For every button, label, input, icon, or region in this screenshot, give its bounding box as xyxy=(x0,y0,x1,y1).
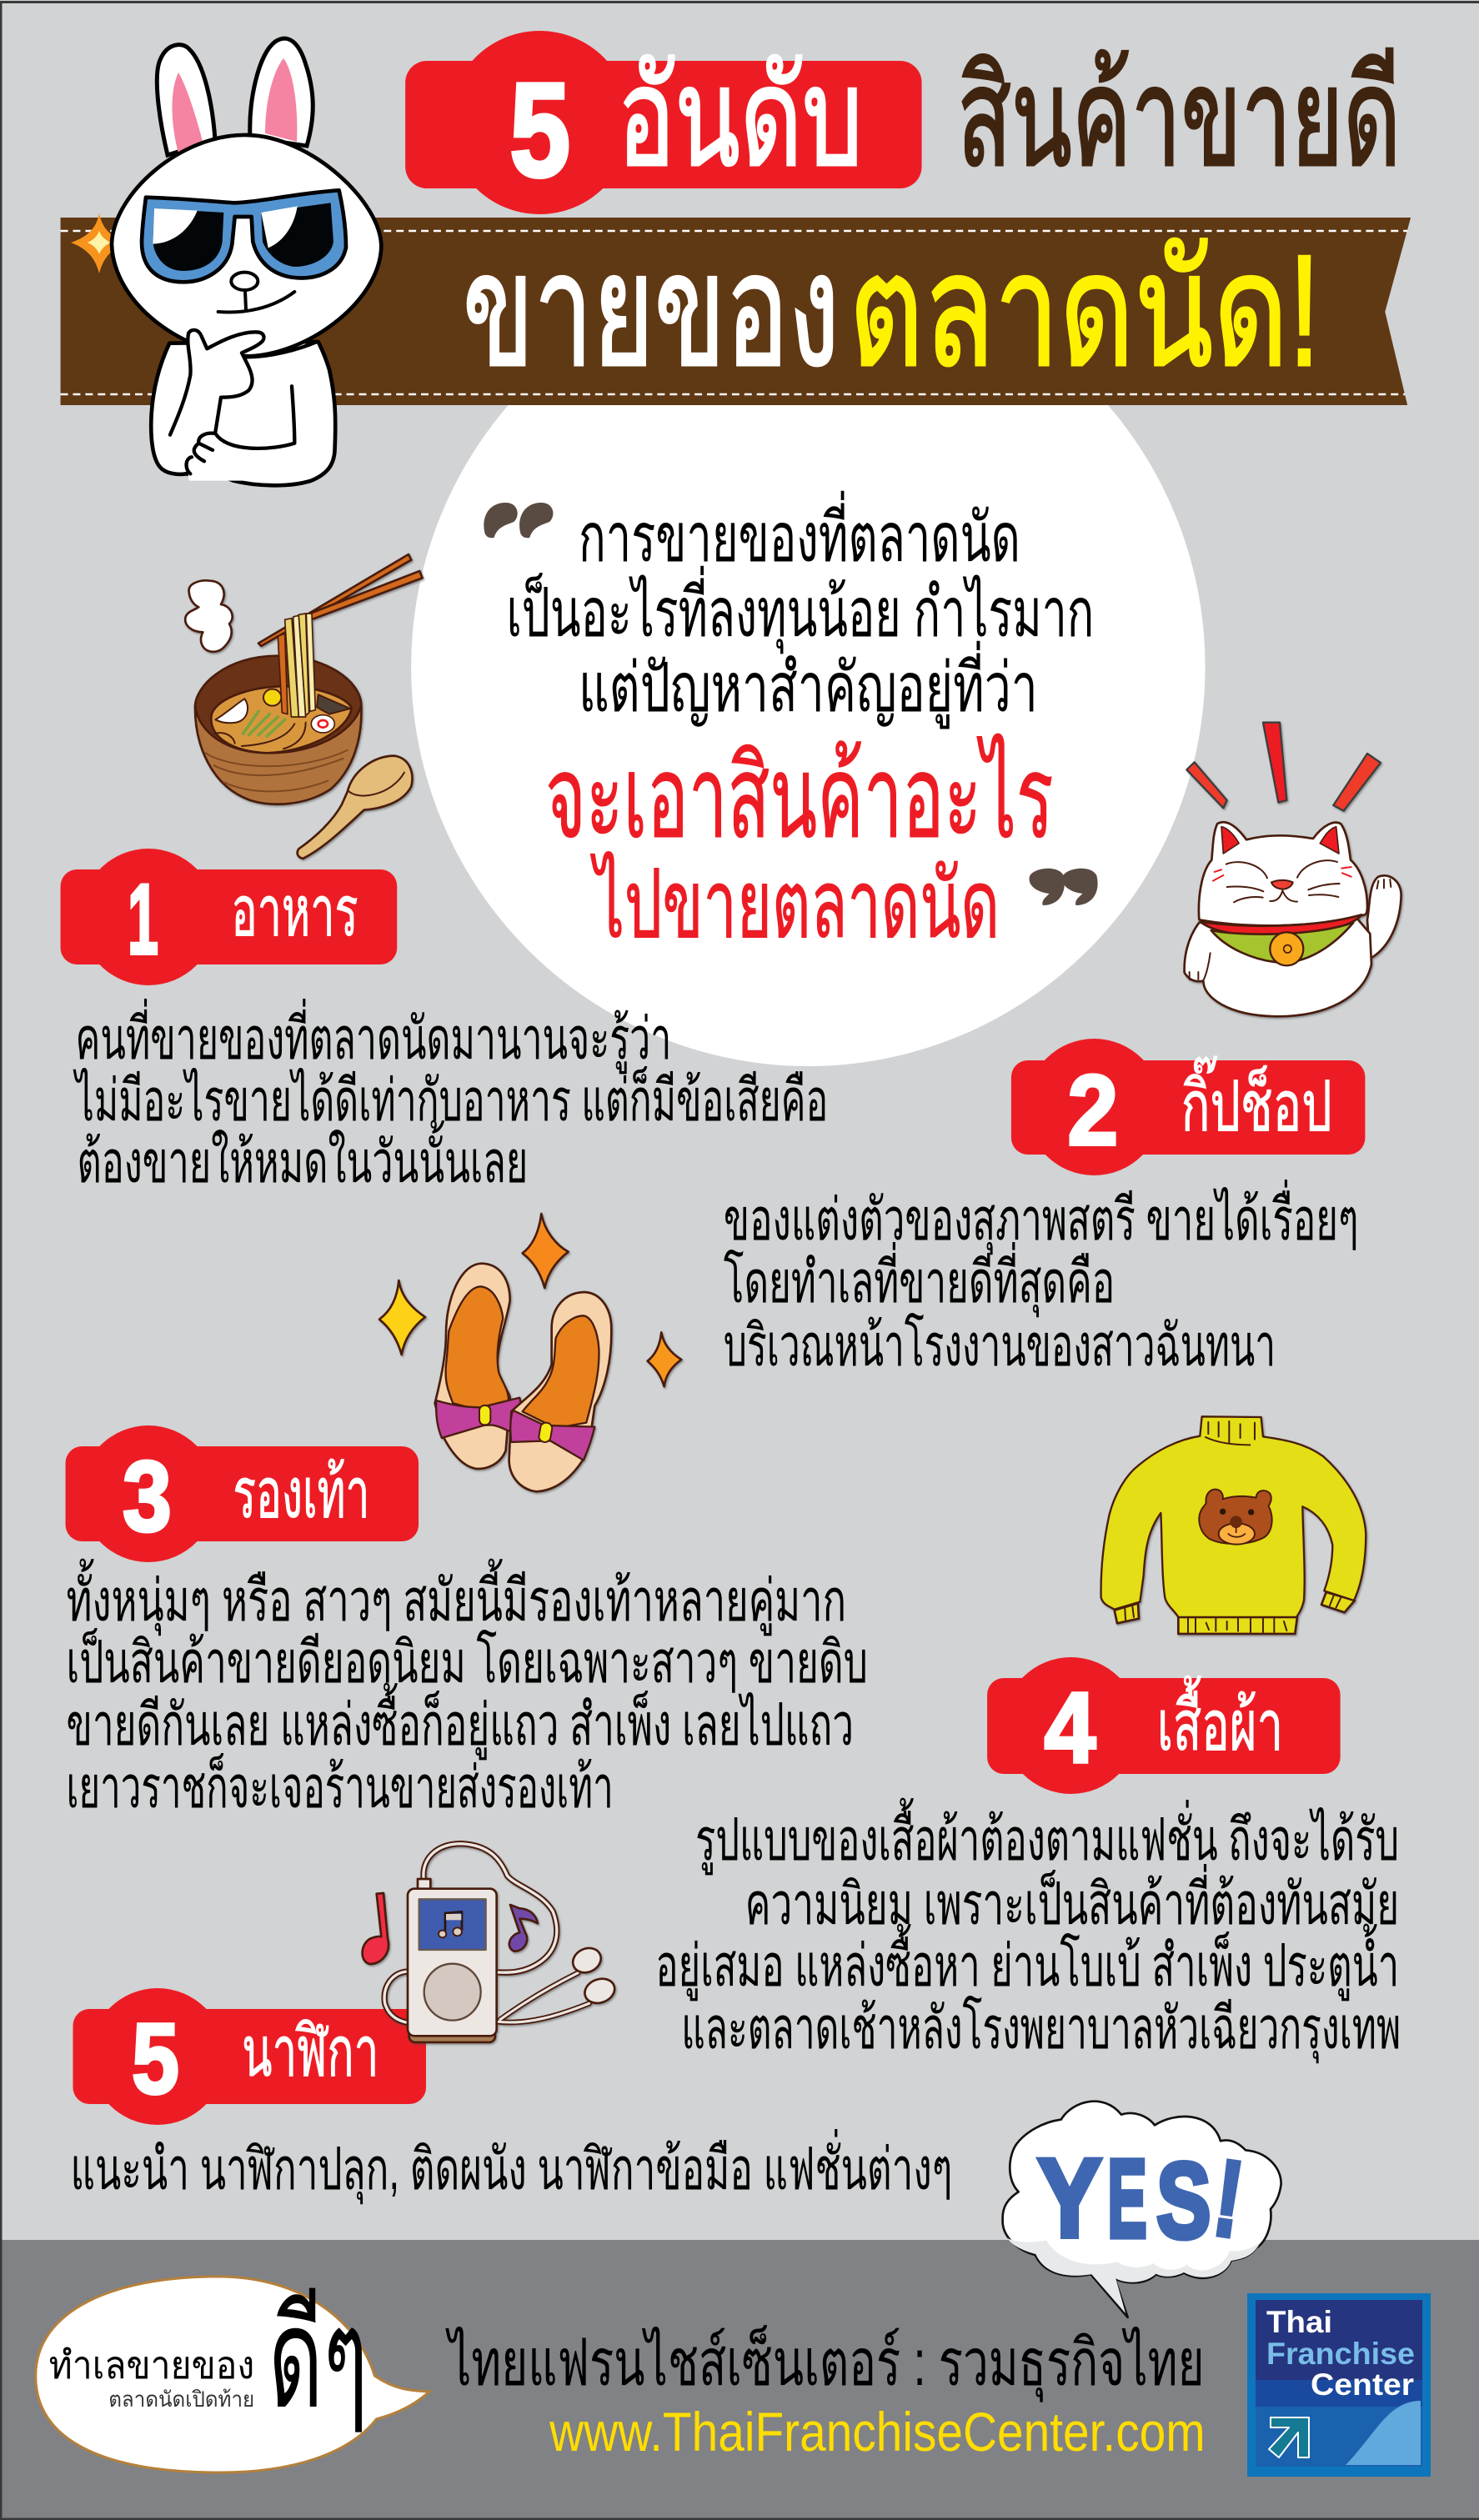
heading badge: 5 อันดับ: 5 xyxy=(509,56,570,204)
badge 2: 2 xyxy=(1068,1055,1118,1166)
text block 1: ต้องขายให้หมดในวันนั้นเลย xyxy=(77,1120,528,1195)
heading badge: 5 อันดับ xyxy=(405,31,922,214)
text block 1 xyxy=(73,999,828,1195)
head xyxy=(1199,822,1367,925)
cable xyxy=(424,1844,557,1972)
earbuds xyxy=(569,1944,605,1977)
logo wing xyxy=(1346,2401,1421,2465)
purple note xyxy=(509,1905,538,1951)
badge 1 xyxy=(61,849,397,985)
alert marks xyxy=(1186,762,1227,808)
badge 4: 4 xyxy=(1045,1673,1095,1784)
soup xyxy=(211,686,352,753)
bowl body xyxy=(195,689,361,804)
bib xyxy=(1211,923,1353,963)
ribbon banner xyxy=(61,218,1411,405)
badge 5: นาฬิกา xyxy=(242,2012,379,2091)
sweater body xyxy=(1101,1416,1366,1617)
hand outline xyxy=(170,330,317,473)
footer website: www.ThaiFranchiseCenter.com xyxy=(549,2401,1206,2462)
paw marks xyxy=(1190,879,1391,980)
title: ขายของตลาดนัด! xyxy=(463,223,1321,399)
speech bubble: YES xyxy=(1003,2102,1281,2317)
footer band xyxy=(0,2240,1479,2520)
narutomaki xyxy=(311,715,334,733)
sparkle xyxy=(71,213,127,273)
logo text: Thai xyxy=(1266,2305,1332,2339)
steam xyxy=(185,580,233,652)
intro highlight text: จะเอาสินค้าอะไร xyxy=(545,734,1054,862)
logo: Center xyxy=(1311,2367,1414,2402)
logo xyxy=(1247,2293,1431,2477)
title: ขายของตลาดนัด!: ขายของ xyxy=(463,223,840,399)
icon: music player xyxy=(363,1844,618,2042)
screen xyxy=(419,1899,486,1950)
badge 2: กิ๊ปช็อป xyxy=(1181,1056,1332,1145)
bowl interior xyxy=(195,656,361,753)
green onion xyxy=(243,711,285,736)
text block 2: โดยทำเลที่ขายดีที่สุดคือ xyxy=(724,1242,1115,1318)
icon: shoes and sparkles xyxy=(379,1214,681,1491)
torso xyxy=(151,342,335,485)
wheel xyxy=(424,1964,481,2021)
footer bubble: ตลาดนัดเปิดท้าย xyxy=(108,2388,254,2412)
text block 3 xyxy=(67,1559,868,1820)
intro text: แต่ปัญหาสำคัญอยู่ที่ว่า xyxy=(579,641,1038,729)
white circle: intro panel xyxy=(411,268,1206,1066)
bear face xyxy=(1199,1490,1272,1544)
icon: sweater xyxy=(1101,1416,1366,1634)
text block 1: คนที่ขายของที่ตลาดนัดมานานจะรู้ว่า xyxy=(75,999,671,1075)
quote mark close xyxy=(1030,869,1098,905)
intro highlight text xyxy=(545,734,1054,958)
title: ขายของตลาดนัด!: ตลาดนัด! xyxy=(849,223,1321,399)
ribbing xyxy=(1125,1421,1341,1632)
head xyxy=(112,135,381,356)
badge 4: เสื้อผ้า xyxy=(1157,1676,1283,1765)
sunglasses xyxy=(142,190,346,282)
YES letters: ! xyxy=(1208,2138,1249,2260)
YES letters: Y xyxy=(1038,2137,1101,2261)
icon: lucky cat xyxy=(1185,723,1401,1016)
body xyxy=(1185,914,1371,1016)
badge 3: 3 xyxy=(123,1441,172,1552)
left shoe xyxy=(435,1264,510,1469)
lens right xyxy=(261,203,333,267)
badge 2 xyxy=(1011,1039,1365,1175)
text block 5: แนะนำ นาฬิกาปลุก, ติดผนัง นาฬิกาข้อมือ แฟชั่นต่างๆ xyxy=(71,2129,952,2205)
text block 3: เป็นสินค้าขายดียอดนิยม โดยเฉพาะสาวๆ ขายดิบ xyxy=(67,1629,868,1695)
bell xyxy=(1270,932,1303,965)
intro highlight text: ไปขายตลาดนัด xyxy=(590,852,1000,958)
player body xyxy=(409,2028,495,2042)
footer bubble xyxy=(36,2277,429,2472)
text block 2 xyxy=(724,1180,1358,1378)
whisker marks xyxy=(1213,867,1351,881)
white fishcake xyxy=(215,699,248,723)
spoon xyxy=(298,756,412,859)
nori xyxy=(317,694,350,714)
logo inner xyxy=(1256,2300,1422,2467)
text block 1: ไม่มีอะไรขายได้ดีเท่ากับอาหาร แต่ก็มีข้อเสียคือ xyxy=(73,1067,828,1133)
badge 1: อาหาร xyxy=(231,872,358,950)
intro text: การขายของที่ตลาดนัด xyxy=(579,491,1020,576)
chopsticks xyxy=(258,554,411,646)
text block 4 xyxy=(655,1798,1401,2064)
hand xyxy=(187,330,294,481)
red note xyxy=(363,1893,389,1964)
sparkles xyxy=(523,1214,569,1288)
music symbol on screen xyxy=(445,1911,462,1934)
badge 3: รองเท้า xyxy=(233,1454,369,1532)
YES letters: E xyxy=(1107,2137,1147,2261)
left bow xyxy=(436,1398,524,1438)
footer bubble: ทำเลขายของ xyxy=(49,2343,254,2387)
text block 3: เยาวราชก็จะเจอร้านขายส่งรองเท้า xyxy=(67,1754,614,1820)
right bow xyxy=(510,1410,594,1460)
badge 4 xyxy=(987,1657,1341,1794)
badge 5: 5 xyxy=(132,2004,179,2115)
badge 3 xyxy=(66,1425,419,1562)
left insole xyxy=(446,1286,509,1411)
quote mark open xyxy=(484,503,553,538)
right insole xyxy=(523,1315,599,1428)
nose and mouth xyxy=(218,290,294,313)
icon: bowl of noodles xyxy=(185,554,423,859)
face lines xyxy=(1226,860,1340,902)
bubble shape xyxy=(1003,2102,1281,2317)
lens left xyxy=(153,208,223,271)
text block 3: ขายดีกันเลย แหล่งซื้อก็อยู่แถว สำเพ็ง เลยไปแถว xyxy=(67,1683,854,1761)
intro text xyxy=(506,491,1094,729)
bubble shading xyxy=(1007,2238,1261,2313)
logo: Franchise xyxy=(1266,2337,1415,2371)
nose xyxy=(1271,880,1293,889)
noodles in soup xyxy=(214,723,306,749)
badge 5 xyxy=(73,1988,426,2125)
ears xyxy=(157,45,215,155)
heading badge: 5 อันดับ: อันดับ xyxy=(618,41,863,194)
bowl stripes xyxy=(206,750,348,791)
rabbit character xyxy=(112,38,381,485)
intro text: เป็นอะไรที่ลงทุนน้อย กำไรมาก xyxy=(506,566,1094,654)
egg xyxy=(263,689,281,706)
cuffs and hem xyxy=(1115,1603,1139,1623)
collar xyxy=(1201,914,1361,936)
footer bubble: ดีๆ xyxy=(268,2281,368,2437)
raised arm xyxy=(1367,875,1401,959)
logo arrow xyxy=(1269,2417,1309,2457)
ear inner xyxy=(1221,827,1239,854)
noodles xyxy=(278,634,288,714)
badge 1: 1 xyxy=(128,864,158,975)
YES letters: S xyxy=(1156,2142,1211,2261)
text block 3: ทั้งหนุ่มๆ หรือ สาวๆ สมัยนี้มีรองเท้าหลายคู่มาก xyxy=(67,1559,846,1636)
body and head drawn at reference zoom scale xyxy=(112,135,381,485)
YES letters xyxy=(1038,2137,1249,2261)
right shoe xyxy=(509,1292,611,1491)
